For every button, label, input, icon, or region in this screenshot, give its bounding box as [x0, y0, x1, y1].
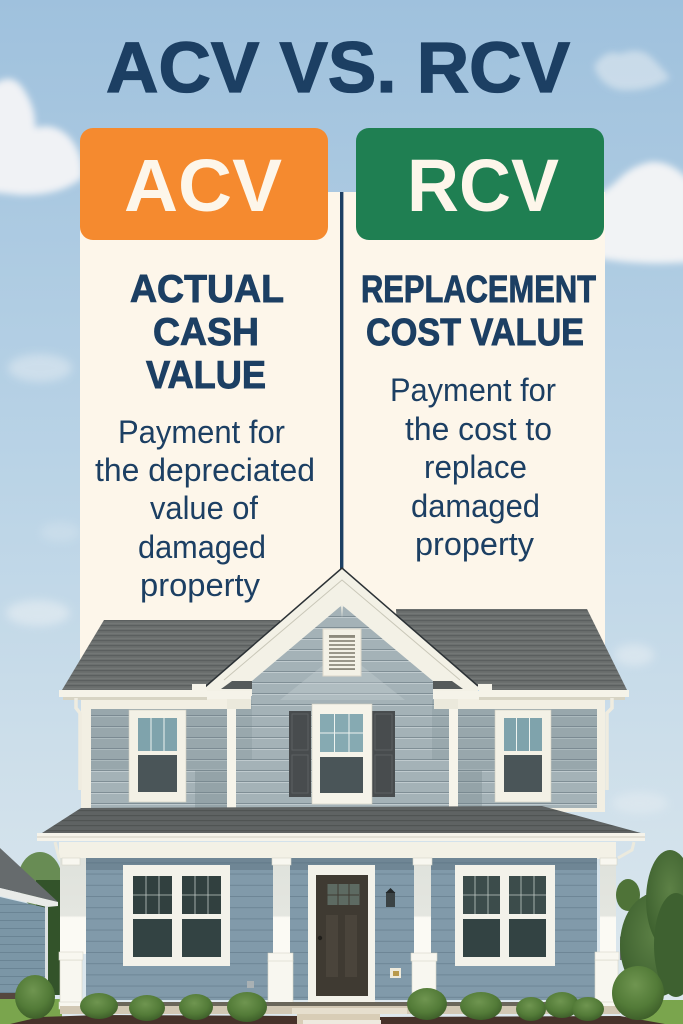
upper roof	[62, 609, 627, 690]
porch floor and walkway	[60, 1002, 620, 1014]
panel: ACV column	[80, 128, 328, 603]
porch right window	[455, 865, 555, 966]
shrubs	[15, 966, 664, 1022]
ACV description: property	[140, 567, 260, 603]
clouds	[0, 51, 683, 814]
trees	[18, 850, 683, 997]
RCV heading: REPLACEMENT	[361, 269, 596, 311]
wall fixtures	[247, 968, 401, 988]
porch columns	[59, 858, 621, 1009]
porch left window	[123, 865, 230, 966]
ACV description: damaged	[138, 529, 266, 565]
RCV description: replace	[424, 449, 527, 485]
RCV description: property	[415, 526, 534, 562]
RCV description: damaged	[411, 488, 540, 524]
front door	[308, 865, 375, 1002]
ACV badge	[80, 128, 328, 240]
upper center window with shutters	[289, 704, 395, 804]
mulch beds	[10, 1015, 665, 1024]
RCV description	[390, 372, 556, 562]
center divider	[340, 192, 343, 570]
title: ACV VS. RCV	[106, 29, 570, 108]
ACV badge: ACV	[124, 144, 282, 227]
upper left window	[129, 710, 186, 802]
upper wall	[81, 672, 605, 812]
upper right window	[495, 710, 551, 802]
porch roof	[42, 806, 641, 833]
grass	[0, 999, 683, 1024]
RCV badge	[356, 128, 604, 240]
ACV description	[95, 414, 315, 603]
ACV description: value of	[150, 490, 258, 526]
gable vent	[323, 629, 361, 676]
lantern	[386, 888, 396, 907]
front walkway	[297, 1014, 381, 1024]
porch wall and frieze	[37, 833, 645, 1000]
gable	[205, 568, 478, 700]
panel: RCV column	[356, 128, 604, 562]
upper eaves and gutters	[59, 684, 629, 790]
RCV description: Payment for	[390, 372, 556, 408]
panel: comparison card	[80, 192, 605, 672]
ACV heading: VALUE	[146, 354, 266, 397]
ACV heading	[130, 268, 284, 397]
ACV description: the depreciated	[95, 452, 315, 488]
house	[10, 568, 665, 1024]
ACV heading: CASH	[153, 311, 259, 354]
RCV description: the cost to	[405, 411, 552, 447]
RCV heading	[361, 269, 596, 354]
neighbor house left	[0, 848, 58, 999]
ACV heading: ACTUAL	[130, 268, 284, 311]
neighboring scenery	[0, 848, 683, 1024]
ACV description: Payment for	[118, 414, 285, 450]
RCV badge: RCV	[407, 144, 559, 227]
RCV heading: COST VALUE	[366, 312, 584, 354]
